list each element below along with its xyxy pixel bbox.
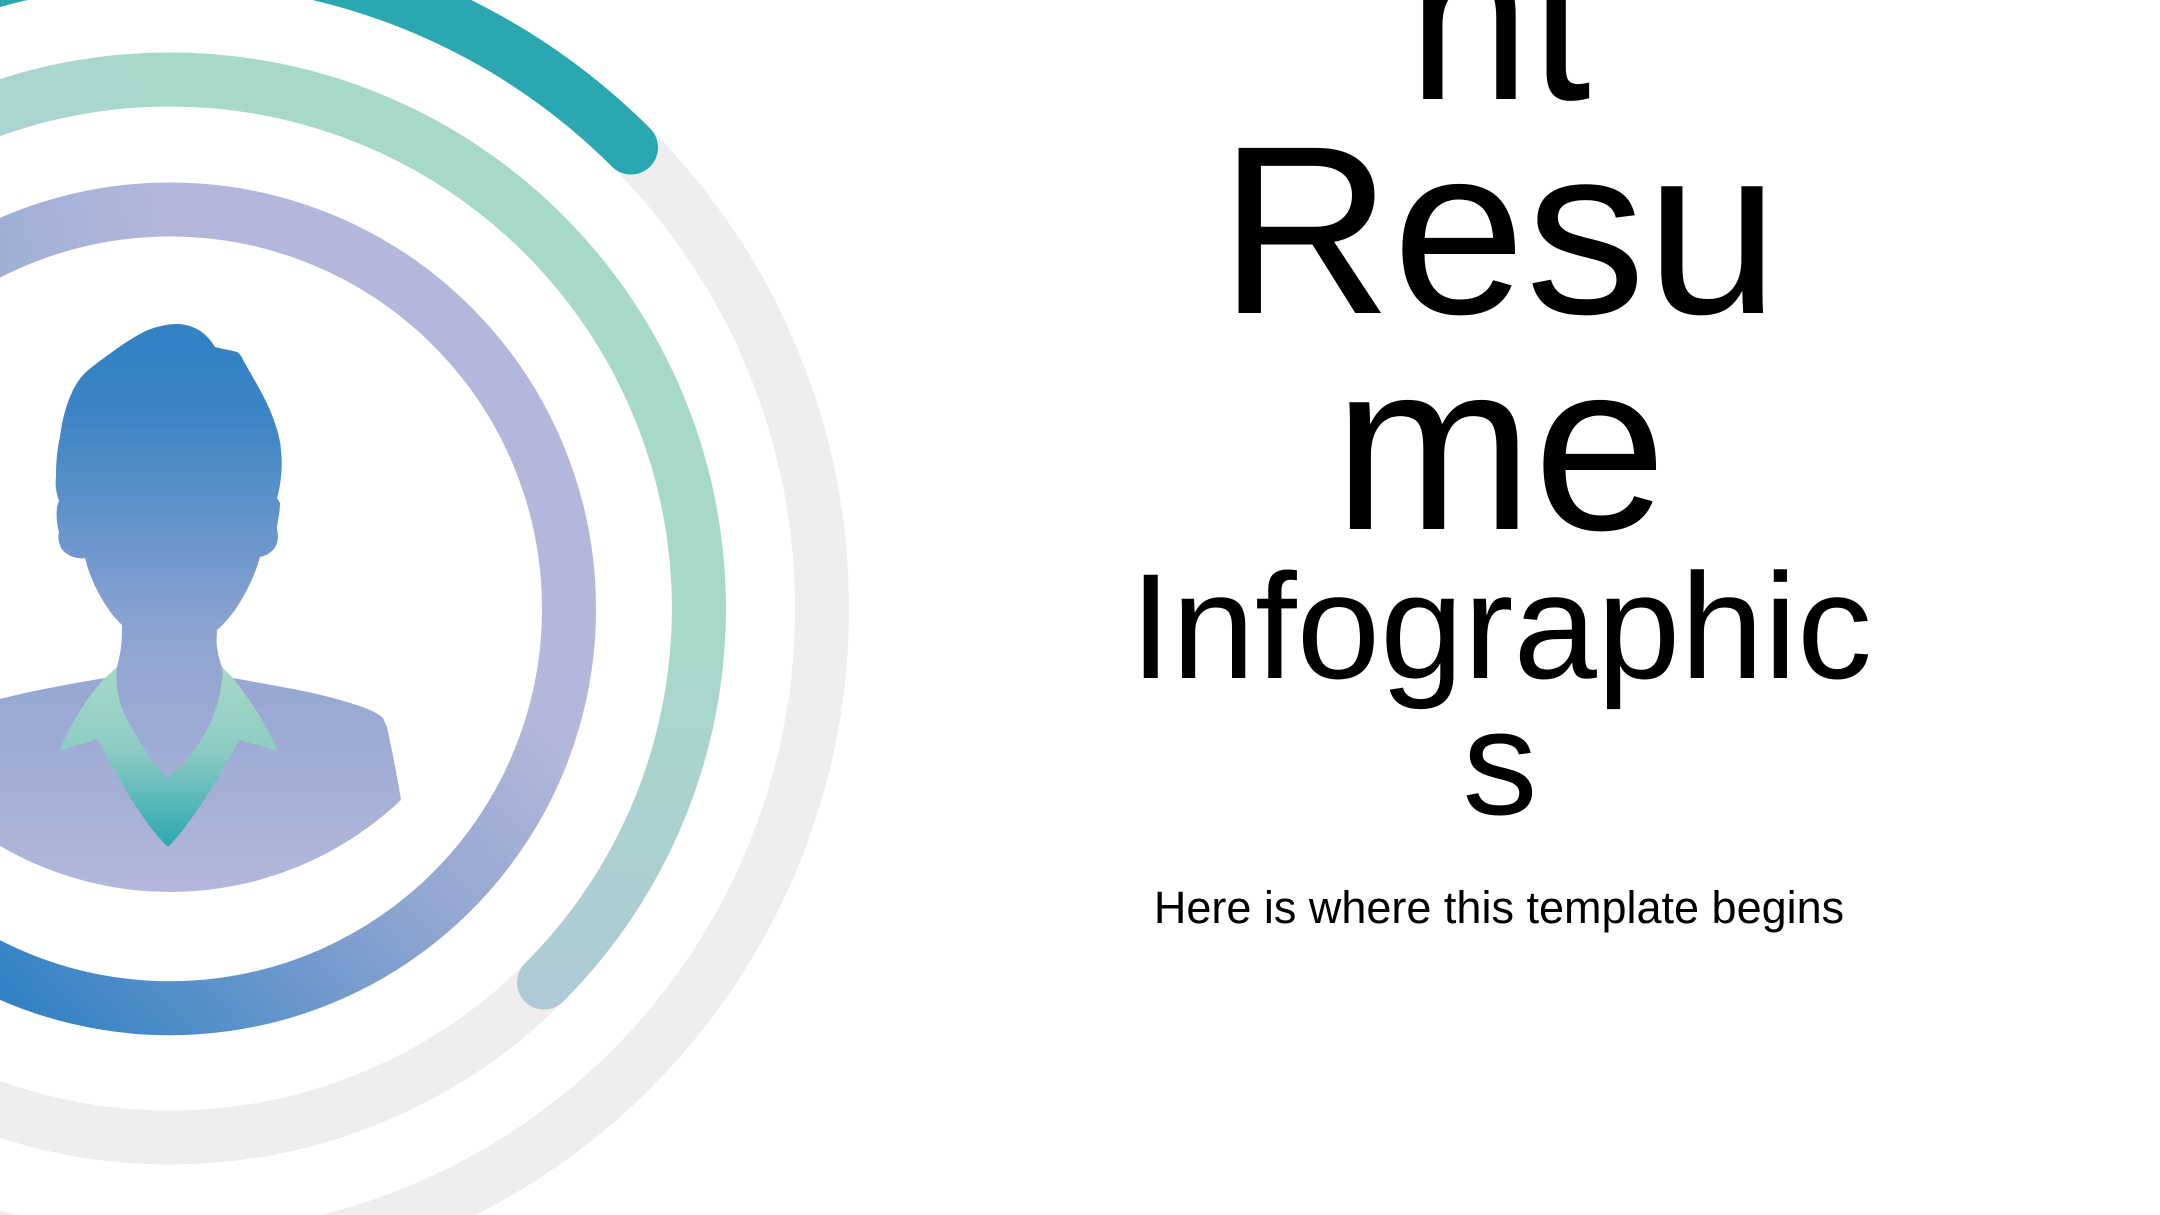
person torso (0, 678, 401, 892)
title line: Resu: Resu (1219, 96, 1779, 364)
subtitle: Here is where this template begins (1154, 882, 1844, 933)
middle ring track: grey (0, 80, 699, 1138)
outer progress arc: teal (0, 0, 631, 608)
title (1130, 0, 1872, 846)
icon: person silhouette with collar (0, 324, 401, 920)
inner progress arc: blue to lavender (0, 210, 569, 1008)
person head and neck (56, 324, 282, 778)
outer ring track: grey (0, 0, 822, 1215)
title line: Infographic: Infographic (1130, 542, 1872, 710)
title line: me: me (1333, 312, 1667, 580)
title line: s: s (1462, 678, 1538, 846)
person collar (59, 667, 278, 847)
middle progress arc: green (0, 80, 699, 982)
